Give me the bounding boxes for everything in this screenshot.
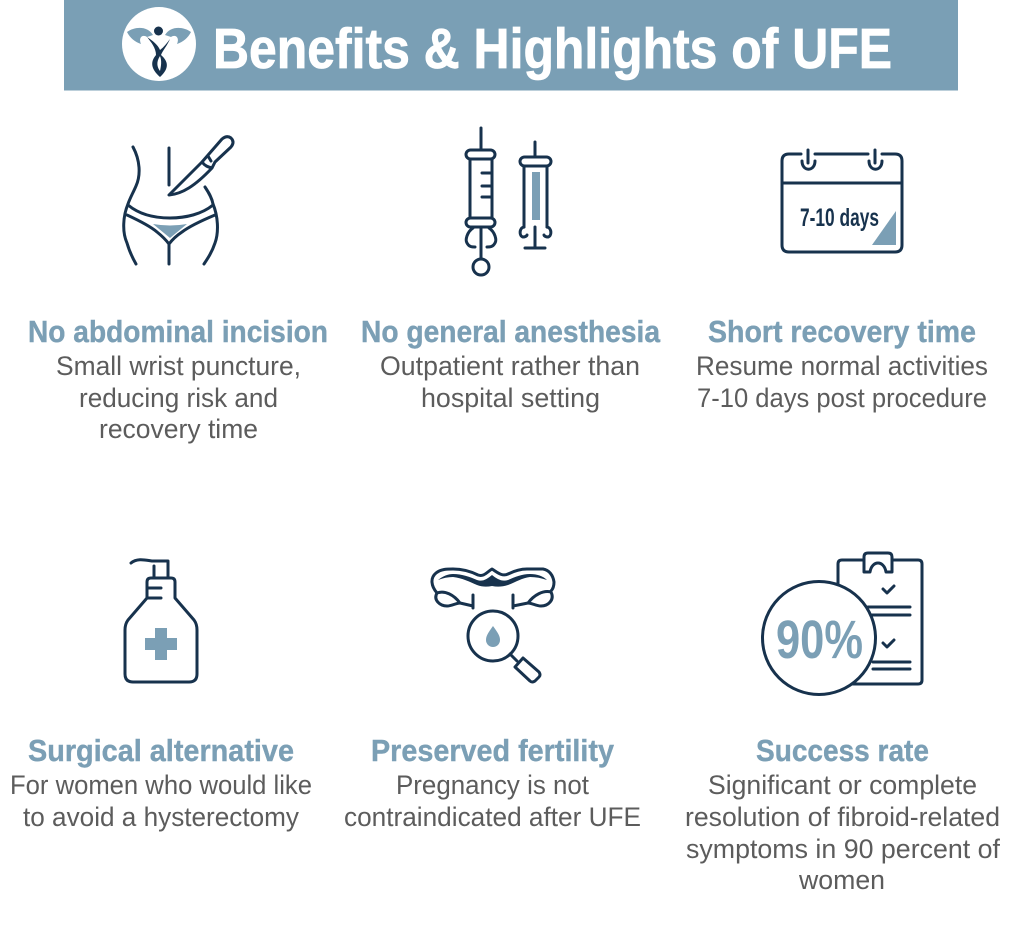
- icon: calendar: 7-10 days: [800, 204, 879, 232]
- description: women: [798, 865, 885, 895]
- description: Significant or complete: [708, 770, 977, 800]
- panel: preserved fertility: [344, 569, 641, 832]
- icon: abdomen and scalpel: [124, 137, 233, 264]
- description: 7-10 days post procedure: [697, 383, 987, 413]
- description: [696, 351, 988, 413]
- description: symptoms in 90 percent of: [686, 834, 1000, 864]
- heading: No abdominal incision: [28, 314, 328, 349]
- description: contraindicated after UFE: [344, 802, 641, 832]
- heading: Short recovery time: [708, 314, 976, 349]
- panel: no general anesthesia: [361, 128, 661, 413]
- description: to avoid a hysterectomy: [23, 802, 299, 832]
- heading: Success rate: [756, 733, 929, 768]
- icon: clipboard with 90 percent: 90%: [776, 610, 863, 670]
- description: [10, 770, 312, 832]
- description: Small wrist puncture,: [56, 351, 301, 381]
- description: recovery time: [99, 414, 258, 444]
- description: reducing risk and: [79, 383, 278, 413]
- icon: uterus with magnifier: [432, 569, 554, 682]
- heading: Preserved fertility: [371, 733, 615, 768]
- title text: Benefits & Highlights of UFE: [213, 17, 892, 81]
- icon: syringes: [466, 128, 551, 275]
- description: resolution of fibroid-related: [685, 802, 1000, 832]
- icon: calendar: [782, 150, 902, 252]
- description: For women who would like: [10, 770, 312, 800]
- icon: clipboard with 90 percent: [762, 553, 922, 694]
- title banner: [64, 0, 958, 90]
- heading: No general anesthesia: [361, 314, 661, 349]
- panel: surgical alternative: [10, 560, 312, 832]
- heading: Surgical alternative: [28, 733, 294, 768]
- panel: success rate: [685, 553, 1000, 895]
- description: [344, 770, 641, 832]
- description: Outpatient rather than: [380, 351, 640, 381]
- description: hospital setting: [421, 383, 600, 413]
- description: [56, 351, 301, 444]
- panel: short recovery time: [696, 150, 988, 413]
- description: Pregnancy is not: [396, 770, 589, 800]
- panel: no abdominal incision: [28, 137, 328, 444]
- icon: pump bottle: [125, 560, 197, 682]
- description: Resume normal activities: [696, 351, 988, 381]
- icon: logo: [122, 7, 196, 81]
- description: [380, 351, 640, 413]
- description: [685, 770, 1000, 895]
